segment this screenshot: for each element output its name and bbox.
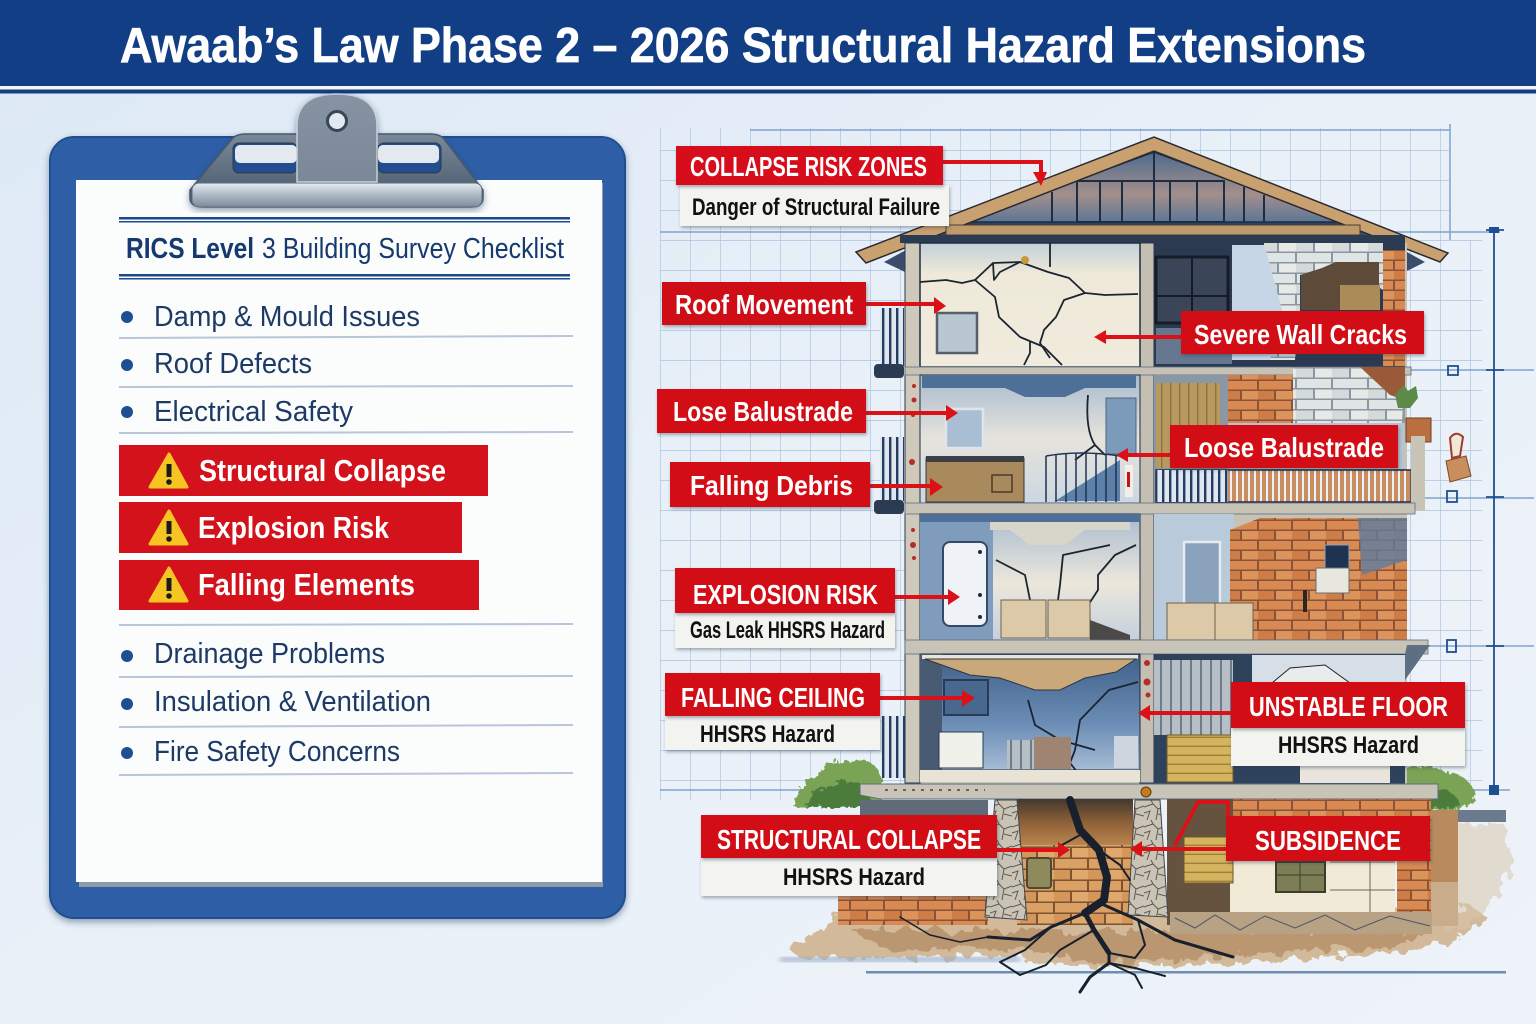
blueprint grid background: [660, 124, 1534, 800]
house: outer walls and floors: [905, 243, 1407, 788]
house: middle floor left room: [920, 375, 1140, 503]
label: severe wall cracks: Severe Wall Cracks: [1194, 319, 1407, 350]
warning item: explosion risk: Explosion Risk: [198, 510, 390, 545]
checklist item: damp and mould: Damp & Mould Issues: [154, 301, 420, 333]
label: falling debris: Falling Debris: [690, 470, 853, 501]
house: lower floor left room with tank: [920, 514, 1140, 640]
title banner: Awaab’s Law Phase 2 – 2026 Structural Hazard Extensions: [120, 19, 1366, 73]
house: gable and roof: [856, 137, 1448, 272]
house: top floor left room with severe cracks: [920, 243, 1140, 367]
panel: clipboard checklist: [50, 94, 625, 918]
checklist item: fire safety: Fire Safety Concerns: [154, 736, 400, 768]
label: collapse risk zones: [676, 146, 1047, 226]
label: falling ceiling: [665, 673, 975, 750]
label: roof movement: [662, 282, 946, 325]
warning item: falling elements: Falling Elements: [198, 567, 415, 602]
label: structural collapse: HHSRS Hazard: [783, 864, 925, 891]
label: subsidence: SUBSIDENCE: [1255, 825, 1401, 856]
label: collapse risk zones: COLLAPSE RISK ZONES: [690, 151, 927, 182]
checklist item: drainage problems: Drainage Problems: [154, 638, 385, 670]
warning item: falling elements: [119, 560, 479, 610]
checklist item: fire safety: [119, 736, 573, 775]
label: unstable floor: HHSRS Hazard: [1278, 732, 1419, 759]
house: foundation slab: [860, 784, 1438, 799]
checklist item: drainage problems: [119, 624, 573, 677]
checklist item: insulation and ventilation: [119, 686, 573, 727]
house: red rubble outline: [1175, 802, 1228, 845]
checklist heading: [119, 217, 570, 280]
label: lose balustrade: [657, 389, 958, 433]
label: falling ceiling: FALLING CEILING: [681, 682, 865, 713]
label: structural collapse: STRUCTURAL COLLAPSE: [717, 824, 981, 855]
house: left balconies: [874, 308, 905, 778]
label: explosion risk: EXPLOSION RISK: [693, 579, 878, 610]
paper sheet: [76, 180, 603, 887]
label: structural collapse: [701, 815, 1070, 896]
label: severe wall cracks: [1094, 311, 1424, 354]
label: subsidence: [1130, 816, 1430, 861]
checklist item: roof defects: [119, 348, 573, 387]
house: lower floor right room with brick wall: [1154, 514, 1407, 640]
label: unstable floor: [1138, 682, 1465, 766]
label: explosion risk: [675, 568, 960, 648]
checklist item: electrical safety: [119, 396, 573, 433]
house: floor slab one: [905, 367, 1411, 375]
house: top floor right room with exposed brick: [1154, 243, 1405, 367]
label: explosion risk: Gas Leak HHSRS Hazard: [690, 617, 885, 644]
house: floor slab three: [905, 640, 1430, 680]
checklist item: electrical safety: Electrical Safety: [154, 396, 353, 428]
label: lose balustrade: Lose Balustrade: [673, 396, 853, 427]
checklist item: roof defects: Roof Defects: [154, 348, 312, 380]
label: collapse risk zones: Danger of Structural Failure: [692, 194, 940, 221]
house: middle floor right room and balcony: [1154, 367, 1411, 503]
checklist heading: 3 Building Survey Checklist: [262, 233, 564, 265]
house: floor slab two: [905, 503, 1415, 514]
house: stone piers: [985, 800, 1168, 920]
title banner: [0, 0, 1536, 94]
warning item: structural collapse: Structural Collapse: [199, 453, 446, 488]
house: basement walls: [838, 799, 1432, 934]
arrow to roof: [943, 162, 1047, 186]
label: roof movement: Roof Movement: [675, 289, 853, 320]
checklist heading: RICS Level: [126, 233, 254, 265]
warning item: explosion risk: [119, 502, 462, 553]
clipboard metal clip: [190, 94, 483, 207]
checklist item: damp and mould: [119, 301, 573, 338]
illustration: ground and soil: [780, 810, 1512, 974]
clipboard board: [50, 137, 625, 918]
label: loose balustrade: Loose Balustrade: [1184, 432, 1384, 463]
label: falling ceiling: HHSRS Hazard: [700, 721, 835, 748]
house: ground floor right room: [1154, 654, 1405, 784]
house: loose brick and plant: [1395, 385, 1471, 511]
label: unstable floor: UNSTABLE FLOOR: [1249, 691, 1448, 722]
checklist item: insulation and ventilation: Insulation & Ventilation: [154, 686, 431, 718]
house: red spalling marks on columns: [909, 384, 1150, 698]
label: falling debris: [670, 462, 943, 507]
label: loose balustrade: [1116, 425, 1398, 468]
house: foundation crack: [900, 800, 1233, 992]
house: ground floor left room with falling ceiling: [920, 654, 1140, 782]
illustration: shrubs: [794, 760, 1476, 810]
warning item: structural collapse: [119, 445, 488, 496]
illustration: cutaway house: [838, 137, 1471, 992]
